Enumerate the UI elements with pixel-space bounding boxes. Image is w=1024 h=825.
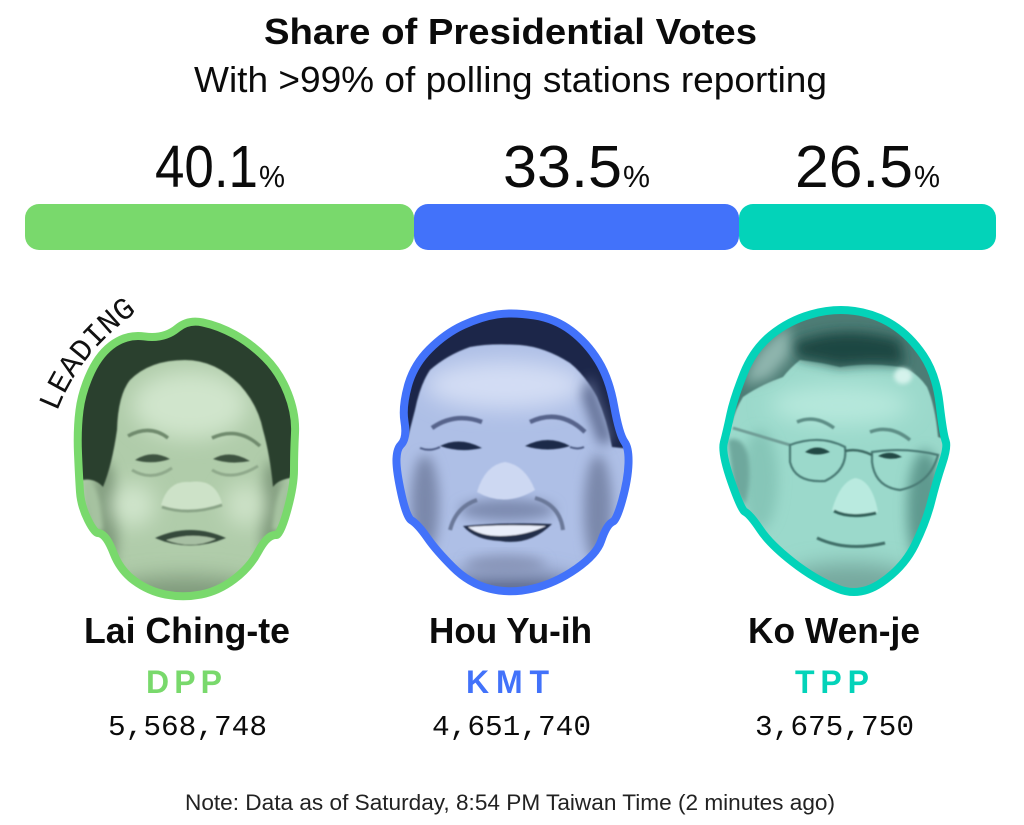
label: LEADING curved text: LEADING bbox=[39, 298, 134, 409]
portrait: Lai Ching-te bbox=[74, 318, 300, 600]
portrait: Hou Yu-ih bbox=[392, 310, 633, 596]
percentage: Lai 40.1%: 40.1 bbox=[155, 134, 258, 200]
candidate: Lai Ching-te bbox=[84, 610, 290, 744]
stacked vote share bar bbox=[25, 204, 996, 250]
name: Lai Ching-te bbox=[84, 610, 290, 651]
party: KMT bbox=[466, 664, 549, 700]
name: Ko Wen-je bbox=[748, 610, 920, 651]
votes: 4,651,740 bbox=[432, 711, 591, 744]
bar: KMT 33.5% bbox=[414, 204, 739, 250]
percentage: Hou 33.5%: 33.5 bbox=[503, 134, 622, 200]
bar: TPP 26.5% bbox=[739, 204, 996, 250]
footnote: Note: Data as of Saturday, 8:54 PM Taiwan Time (2 minutes ago) bbox=[185, 790, 835, 815]
title: Share of Presidential Votes bbox=[264, 11, 757, 52]
votes: 5,568,748 bbox=[108, 711, 267, 744]
bar: DPP 40.1% bbox=[25, 204, 414, 250]
party: DPP bbox=[146, 664, 222, 700]
percentage: Lai 40.1%: % bbox=[259, 159, 285, 194]
candidate: Ko Wen-je bbox=[748, 610, 920, 744]
subtitle: With >99% of polling stations reporting bbox=[194, 59, 827, 100]
votes: 3,675,750 bbox=[755, 711, 914, 744]
percentage: Ko 26.5%: 26.5 bbox=[795, 134, 913, 200]
portrait: Ko Wen-je bbox=[719, 306, 950, 596]
party: TPP bbox=[795, 664, 869, 700]
name: Hou Yu-ih bbox=[429, 610, 592, 651]
percentage: Hou 33.5%: % bbox=[623, 159, 650, 194]
percentage: Ko 26.5%: % bbox=[914, 159, 940, 194]
candidate: Hou Yu-ih bbox=[429, 610, 592, 744]
